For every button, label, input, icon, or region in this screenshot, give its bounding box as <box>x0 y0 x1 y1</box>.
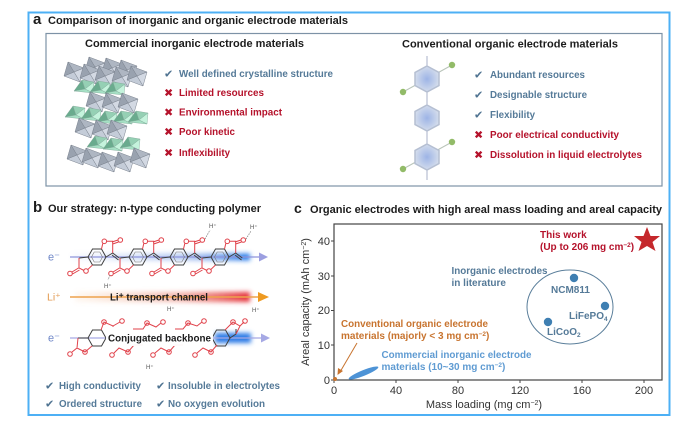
cluster: inorganic electrode data points: LiCoO <box>547 327 577 338</box>
cluster: inorganic electrode data points <box>527 270 613 344</box>
icon: organic molecule <box>400 56 455 180</box>
plot frame and axes: 200 <box>635 385 653 397</box>
label: commercial inorganic materials: Commercial inorganic electrode <box>382 350 532 361</box>
plot frame and axes: 40 <box>318 236 330 248</box>
polymer chain bottom with conjugated backbone label: Conjugated backbone <box>108 332 211 344</box>
list: organic properties: ✔ <box>474 70 483 82</box>
cluster: inorganic electrode data points: 2 <box>577 332 581 339</box>
polymer chain bottom with conjugated backbone label: H⁺ <box>146 364 154 371</box>
label: this work: ) <box>631 242 634 253</box>
plot frame and axes: 120 <box>511 385 529 397</box>
list: polymer advantages: High conductivity <box>59 381 141 392</box>
label: this work: −2 <box>623 242 631 249</box>
polymer chain bottom with conjugated backbone label: e⁻ <box>48 332 60 344</box>
label: this work <box>540 230 634 253</box>
label: this work: This work <box>540 230 587 241</box>
x axis title: ) <box>538 399 542 411</box>
list: inorganic properties: ✖ <box>164 107 173 119</box>
panel c: mass loading versus areal capacity chart <box>294 200 663 411</box>
x axis title: Mass loading (mg cm <box>426 399 530 411</box>
label: conventional organic materials: −2 <box>479 331 486 338</box>
icon: inorganic crystal structure <box>64 57 150 172</box>
plot frame and axes: 0 <box>324 375 330 387</box>
polymer chain top with electron arrow <box>48 223 268 290</box>
list: polymer advantages: No oxygen evolution <box>168 399 265 410</box>
list: inorganic properties: Inflexibility <box>179 148 230 159</box>
heading: organic materials: Conventional organic electrode materials <box>402 38 618 50</box>
panel a heading: Comparison of inorganic and organic electrode materials <box>48 15 348 27</box>
list: organic properties: Designable structure <box>490 90 587 101</box>
list: inorganic properties: ✖ <box>164 126 173 138</box>
panel c heading: Organic electrodes with high areal mass loading and areal capacity <box>310 204 663 216</box>
plot frame and axes: 80 <box>452 385 464 397</box>
polymer chain bottom with conjugated backbone label <box>48 306 270 371</box>
polymer chain top with electron arrow: H⁺ <box>250 224 258 231</box>
label: conventional organic materials <box>341 319 489 342</box>
comparison box <box>46 34 662 186</box>
label: inorganic electrodes in literature: Inorganic electrodes <box>452 266 548 277</box>
marker: commercial inorganic region <box>348 364 379 382</box>
list: polymer advantages: ✔ <box>156 398 165 410</box>
label: conventional organic materials: materials (majorly < 3 mg cm <box>341 331 479 342</box>
label: this work: (Up to 206 mg cm <box>540 242 623 253</box>
list: polymer advantages: Insoluble in electrolytes <box>168 381 280 392</box>
plot frame and axes: 20 <box>318 305 330 317</box>
polymer chain top with electron arrow: H⁺ <box>209 223 216 230</box>
y axis title: −2 <box>301 242 308 250</box>
marker: this work star <box>634 227 660 251</box>
panel b heading <box>33 199 262 216</box>
label: commercial inorganic materials: ) <box>502 362 505 373</box>
list: organic properties: Abundant resources <box>490 70 585 81</box>
list: inorganic properties: ✖ <box>164 148 173 160</box>
polymer chain top with electron arrow: H⁺ <box>104 283 112 290</box>
Li+ transport channel arrow: Li⁺ transport channel <box>110 292 208 304</box>
label: inorganic electrodes in literature: in literature <box>452 278 506 289</box>
plot frame and axes: 10 <box>318 340 330 352</box>
list: inorganic properties: Limited resources <box>179 88 264 99</box>
list: inorganic properties: ✔ <box>164 68 173 80</box>
list: polymer advantages: ✔ <box>45 380 54 392</box>
list: polymer advantages: Ordered structure <box>59 399 142 410</box>
label: commercial inorganic materials: −2 <box>495 362 502 369</box>
y axis title: Areal capacity (mAh cm <box>300 250 312 366</box>
label: conventional organic materials: ) <box>486 331 489 342</box>
list: organic properties: ✔ <box>474 90 483 102</box>
Li+ transport channel arrow <box>47 292 269 304</box>
list: organic properties: Flexibility <box>490 110 535 121</box>
panel b: n-type conducting polymer strategy <box>33 199 280 410</box>
plot frame and axes: 0 <box>331 385 337 397</box>
panel a heading <box>33 11 348 28</box>
list: organic properties: Dissolution in liquid electrolytes <box>490 150 642 161</box>
list: polymer advantages <box>45 380 280 410</box>
polymer chain bottom with conjugated backbone label: H⁺ <box>252 307 260 314</box>
heading: inorganic materials: Commercial inorganic electrode materials <box>85 38 304 50</box>
panel b heading: b <box>33 199 42 216</box>
list: inorganic properties: ✖ <box>164 88 173 100</box>
label: commercial inorganic materials: materials (10~30 mg cm <box>382 362 495 373</box>
plot frame and axes: 40 <box>390 385 402 397</box>
cluster: inorganic electrode data points: 4 <box>604 316 608 323</box>
plot frame and axes <box>318 224 662 397</box>
panel a: comparison of materials <box>33 11 662 186</box>
panel a heading: a <box>33 11 42 28</box>
Li+ transport channel arrow: Li⁺ <box>47 292 61 304</box>
plot frame and axes: 160 <box>573 385 591 397</box>
list: inorganic properties <box>164 68 333 160</box>
list: inorganic properties: Environmental impact <box>179 108 283 118</box>
panel c heading: c <box>294 200 302 216</box>
label: commercial inorganic materials <box>382 350 532 373</box>
list: inorganic properties: Poor kinetic <box>179 127 235 138</box>
list: organic properties <box>474 70 642 162</box>
list: organic properties: ✖ <box>474 130 483 142</box>
list: polymer advantages: ✔ <box>45 398 54 410</box>
list: organic properties: ✔ <box>474 110 483 122</box>
plot frame and axes: 30 <box>318 271 330 283</box>
list: organic properties: ✖ <box>474 150 483 162</box>
cluster: inorganic electrode data points: NCM811 <box>551 285 590 296</box>
cluster: inorganic electrode data points: LiFePO <box>569 311 604 322</box>
list: polymer advantages: ✔ <box>156 380 165 392</box>
panel b heading: Our strategy: n-type conducting polymer <box>48 203 262 215</box>
label: conventional organic materials: Conventional organic electrode <box>341 319 488 330</box>
list: inorganic properties: Well defined crystalline structure <box>179 69 333 80</box>
list: organic properties: Poor electrical conductivity <box>490 130 619 141</box>
arrow: to conventional organic region <box>333 343 357 381</box>
label: inorganic electrodes in literature <box>452 266 548 289</box>
polymer chain top with electron arrow: e⁻ <box>48 252 60 264</box>
x axis title: −2 <box>530 400 539 407</box>
y axis title: ) <box>300 238 312 242</box>
polymer chain bottom with conjugated backbone label: H⁺ <box>167 306 174 313</box>
